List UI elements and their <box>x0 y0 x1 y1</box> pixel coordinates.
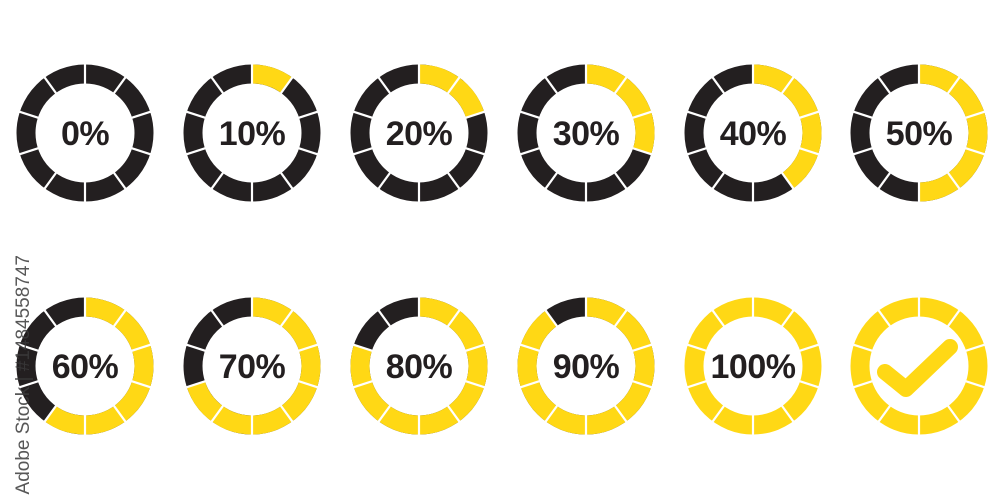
ring: 30% <box>518 62 654 204</box>
ring: 40%: 40% <box>720 115 787 153</box>
ring: 50% <box>851 62 987 204</box>
ring: 100% <box>685 295 821 437</box>
ring: 90% <box>518 295 654 437</box>
ring: 60% <box>17 295 153 437</box>
watermark id text: Adobe Stock | #1484558747 <box>13 255 34 494</box>
ring: 0%: 0% <box>61 115 109 153</box>
ring: 60%: 60% <box>52 348 119 386</box>
ring: complete with checkmark <box>851 295 987 437</box>
ring: 30%: 30% <box>553 115 620 153</box>
ring: 80%: 80% <box>386 348 453 386</box>
ring: 20% <box>351 62 487 204</box>
ring: 20%: 20% <box>386 115 453 153</box>
icon: checkmark <box>885 347 950 389</box>
ring: 90%: 90% <box>553 348 620 386</box>
ring: 70% <box>184 295 320 437</box>
ring: 70%: 70% <box>219 348 286 386</box>
ring: 100%: 100% <box>711 348 796 386</box>
ring: 10% <box>184 62 320 204</box>
ring: 10%: 10% <box>219 115 286 153</box>
ring: 80% <box>351 295 487 437</box>
ring: 40% <box>685 62 821 204</box>
ring: 50%: 50% <box>886 115 953 153</box>
ring: 0% <box>17 62 153 204</box>
